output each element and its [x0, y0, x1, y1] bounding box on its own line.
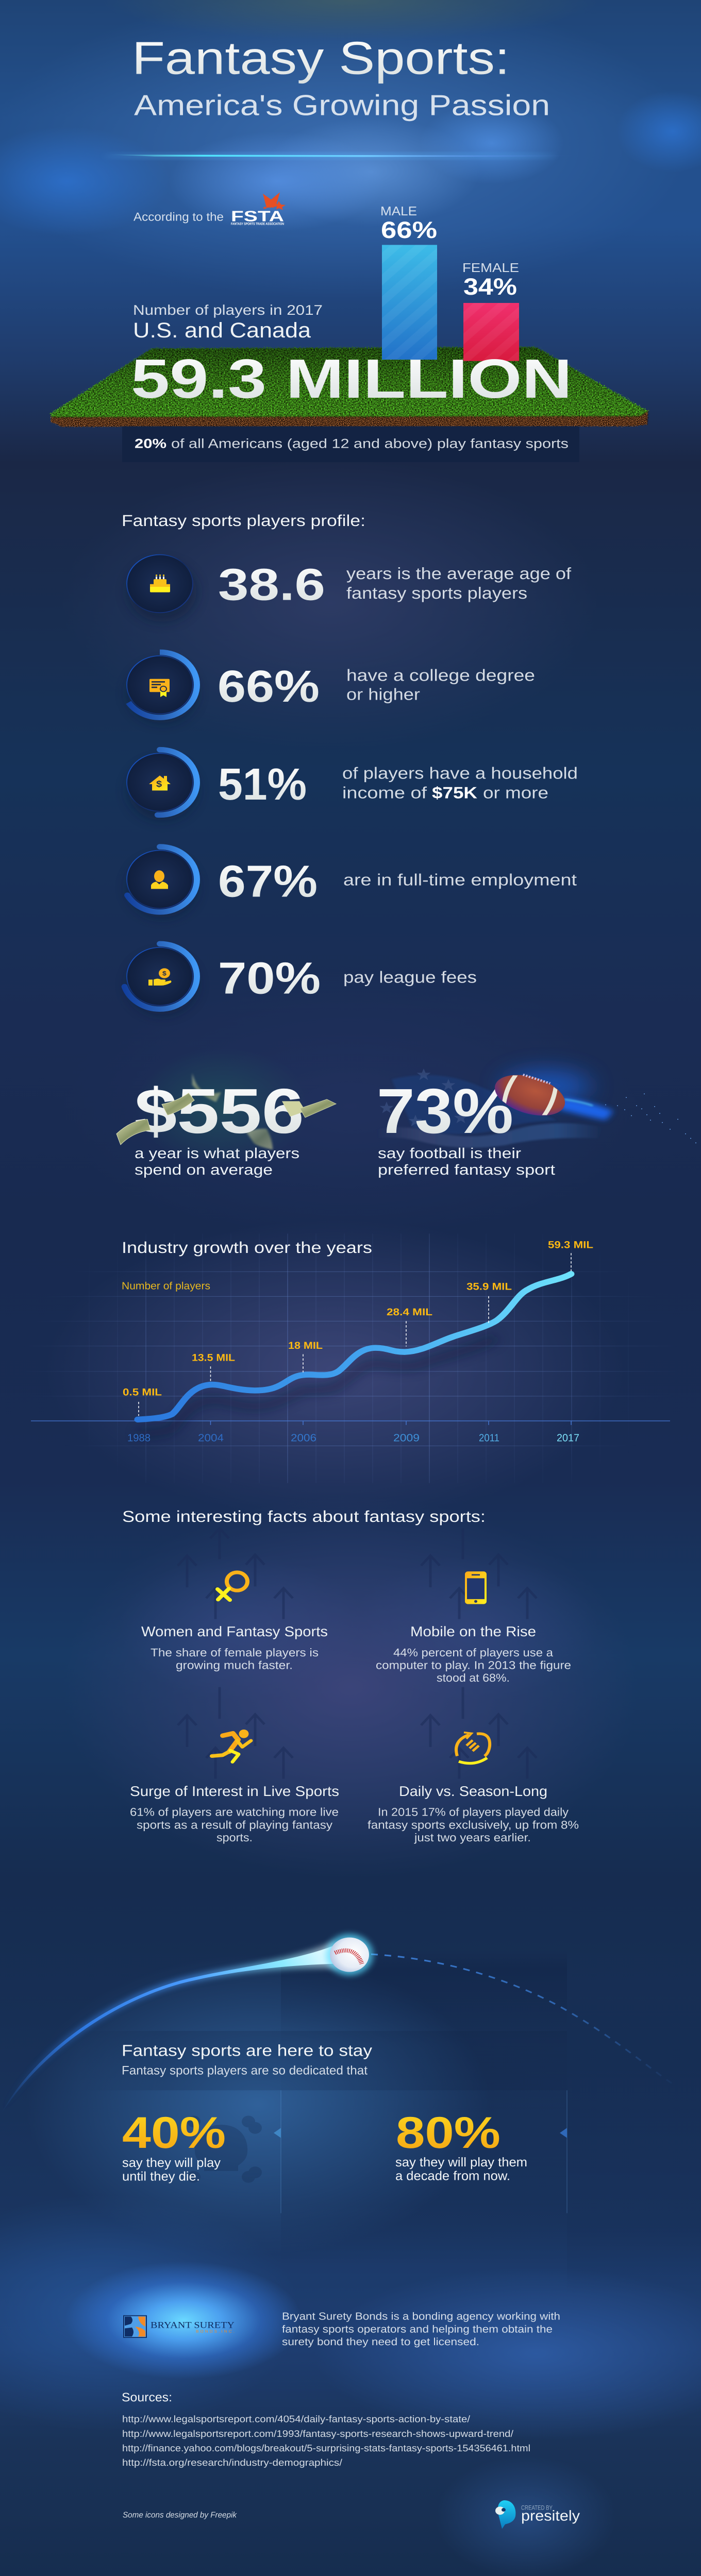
curve shadow: [138, 1338, 496, 1434]
callout bar: 20%: [135, 437, 166, 451]
row: degree: or higher: [346, 685, 420, 703]
text: [135, 1145, 299, 1178]
years: 2009: [393, 1432, 420, 1444]
heading: Fantasy sports are here to stay: [122, 2042, 372, 2059]
logo: presitely: CREATED BY: [521, 2504, 553, 2511]
years: 2004: [198, 1432, 224, 1444]
glow line: [103, 154, 586, 159]
row: income: [123, 750, 578, 820]
fact: live sports: sports.: [216, 1832, 253, 1844]
panel: facts: [122, 1508, 579, 1844]
subtitle: America's Growing Passion: [134, 89, 550, 122]
bills: [116, 1093, 336, 1145]
row: employment: 67%: [218, 856, 318, 906]
fact: mobile: [376, 1571, 571, 1684]
bar: male: [380, 204, 437, 360]
panel: here to stay: [0, 1934, 701, 2295]
years: [127, 1432, 579, 1444]
panel: spending stat: $556: [135, 1075, 304, 1146]
axis label: Number of players: [122, 1280, 210, 1292]
fact: mobile: Mobile on the Rise: [410, 1623, 536, 1639]
row: age: fantasy sports players: [346, 584, 527, 602]
stat: 40%: until they die.: [122, 2169, 200, 2183]
row: income: 51%: [218, 759, 307, 809]
row: degree: [123, 652, 535, 723]
credit: Some icons designed by Freepik: [123, 2510, 237, 2519]
text: [378, 1145, 555, 1178]
fact: live sports: Surge of Interest in Live Sports: [130, 1783, 339, 1799]
players label: Number of players in 2017: [133, 302, 323, 318]
fact: daily: In 2015 17% of players played daily: [378, 1806, 569, 1819]
sources: http://www.legalsportsreport.com/4054/daily-fantasy-sports-action-by-state/: [122, 2414, 470, 2425]
fact: daily: just two years earlier.: [414, 1832, 531, 1844]
callout bar: of all Americans (aged 12 and above) play fantasy sports: [171, 437, 569, 451]
icon: baseball: [326, 1934, 373, 1976]
panel: profile: [122, 512, 578, 1014]
years: 2006: [291, 1432, 316, 1444]
panel: football stat: 73%: [377, 1075, 513, 1146]
row: fees: [123, 944, 477, 1014]
icon: coin in hand: $: [162, 970, 166, 977]
fact: daily: Daily vs. Season-Long: [399, 1783, 547, 1799]
icon: person: [151, 870, 168, 889]
according to: According to the: [133, 210, 224, 224]
grid: [47, 1233, 655, 1483]
icon: cake: [150, 574, 170, 592]
row: income: income of: [342, 783, 427, 802]
row: income: or more: [483, 783, 548, 802]
row: age: 38.6: [218, 559, 325, 609]
icon: football with arrows: [456, 1733, 490, 1764]
dim bills: [192, 1073, 273, 1150]
text: say football is their: [378, 1145, 521, 1161]
flag and comet trail: [376, 1069, 696, 1148]
heading: Some interesting facts about fantasy sports:: [122, 1508, 486, 1526]
logo: Bryant Surety: BRYANT SURETY: [151, 2320, 235, 2330]
bar: female: FEMALE: [462, 261, 519, 275]
icon: football: [489, 1067, 571, 1123]
hero section: [51, 32, 648, 462]
title: Fantasy Sports:: [132, 32, 510, 84]
data labels: 59.3 MIL: [548, 1239, 593, 1250]
row: fees: 70%: [218, 953, 321, 1003]
row: age: years is the average age of: [346, 564, 572, 583]
grass field: [51, 347, 648, 427]
fact: mobile: 44% percent of players use a: [393, 1646, 553, 1659]
row: fees: pay league fees: [343, 968, 477, 987]
logo: FSTA: FANTASY SPORTS TRADE ASSOCIATION: [231, 222, 284, 226]
background arrows: [178, 1529, 537, 1778]
icon: certificate: [149, 679, 170, 697]
about text: Bryant Surety Bonds is a bonding agency working with: [282, 2310, 560, 2322]
sources: http://www.legalsportsreport.com/1993/fantasy-sports-research-shows-upward-trend/: [122, 2429, 513, 2439]
fact: live sports: sports as a result of playing fantasy: [137, 1819, 332, 1832]
panel shading: [77, 1950, 701, 2295]
bar: female: 34%: [463, 274, 517, 300]
row: income: $75K: [432, 783, 477, 802]
chart: industry growth: [0, 1233, 701, 1483]
fact: daily: [368, 1733, 579, 1844]
heading: Fantasy sports players profile:: [122, 512, 365, 530]
callout bar: [122, 426, 579, 462]
data labels: [123, 1239, 593, 1416]
players label: [133, 302, 323, 342]
data labels: 0.5 MIL: [123, 1386, 162, 1398]
big number: 59.3 MILLION: [131, 348, 572, 410]
icon: phone: [465, 1571, 487, 1604]
logo: presitely: presitely: [521, 2507, 580, 2524]
fact: women: Women and Fantasy Sports: [141, 1623, 328, 1639]
about text: [282, 2310, 560, 2347]
fact: daily: fantasy sports exclusively, up from 8%: [368, 1819, 579, 1832]
icon: female symbol: [218, 1572, 247, 1600]
stat: 40%: [122, 2108, 226, 2183]
bar: male: 66%: [381, 217, 437, 244]
comet trail: [0, 1941, 340, 2116]
data labels: 28.4 MIL: [387, 1306, 432, 1317]
fact: women: growing much faster.: [176, 1659, 293, 1672]
axis: [31, 1421, 670, 1425]
subheading: Fantasy sports players are so dedicated that: [122, 2063, 368, 2077]
row: income: of players have a household: [342, 764, 578, 782]
sources: Sources:: [122, 2391, 172, 2404]
fact: women: [141, 1572, 328, 1672]
fact: mobile: computer to play. In 2013 the figure: [376, 1659, 571, 1672]
icon: coin in hand: [148, 968, 171, 986]
data labels: 13.5 MIL: [192, 1352, 235, 1363]
panel: spending stat: [116, 1073, 336, 1178]
logo: FSTA: FSTA: [231, 208, 284, 225]
sources: [122, 2391, 530, 2468]
text: preferred fantasy sport: [378, 1161, 555, 1178]
data labels: 18 MIL: [288, 1340, 323, 1351]
about text: surety bond they need to get licensed.: [282, 2335, 479, 2347]
stat: 80%: [395, 2108, 527, 2183]
players label: U.S. and Canada: [133, 318, 311, 342]
icon: house: $: [156, 779, 162, 789]
heading: Industry growth over the years: [122, 1239, 372, 1257]
bar: female: [462, 261, 519, 361]
fact: live sports: 61% of players are watching more live: [130, 1806, 339, 1819]
text: a year is what players: [135, 1145, 299, 1161]
text: spend on average: [135, 1161, 273, 1178]
fact: women: The share of female players is: [151, 1646, 319, 1659]
about text: fantasy sports operators and helping them obtain the: [282, 2323, 553, 2335]
row: age: [127, 555, 572, 622]
fact: live sports: [130, 1730, 339, 1844]
stat: 80%: say they will play them: [395, 2155, 527, 2169]
logo: Bryant Surety: BONDS,INC.: [196, 2329, 235, 2333]
years: 2017: [557, 1432, 579, 1444]
data labels: 35.9 MIL: [466, 1281, 512, 1292]
sources: http://finance.yahoo.com/blogs/breakout/5-surprising-stats-fantasy-sports-154356461.html: [122, 2443, 530, 2453]
years: 2011: [479, 1432, 499, 1444]
logo: Bryant Surety: [124, 2316, 235, 2337]
sources: http://fsta.org/research/industry-demographics/: [122, 2458, 342, 2468]
panel: football stat: [376, 1067, 696, 1178]
icon: runner: [212, 1730, 251, 1762]
row: degree: 66%: [218, 661, 320, 711]
row: degree: have a college degree: [346, 666, 535, 684]
row: employment: [123, 846, 577, 918]
stat: 40%: 40%: [122, 2108, 226, 2158]
skull: [187, 2116, 262, 2183]
stat: 80%: a decade from now.: [395, 2169, 510, 2183]
stat: 40%: say they will play: [122, 2156, 221, 2170]
years: 1988: [127, 1432, 151, 1444]
stat: 80%: 80%: [396, 2108, 500, 2158]
bar: male: MALE: [380, 204, 417, 218]
logo: FSTA: [231, 192, 286, 226]
icon: house: [149, 775, 171, 790]
curve: [138, 1274, 571, 1419]
dashed trajectory: [371, 1954, 676, 2086]
row: employment: are in full-time employment: [343, 870, 577, 889]
logo: presitely: [495, 2500, 580, 2529]
fact: mobile: stood at 68%.: [437, 1672, 510, 1684]
